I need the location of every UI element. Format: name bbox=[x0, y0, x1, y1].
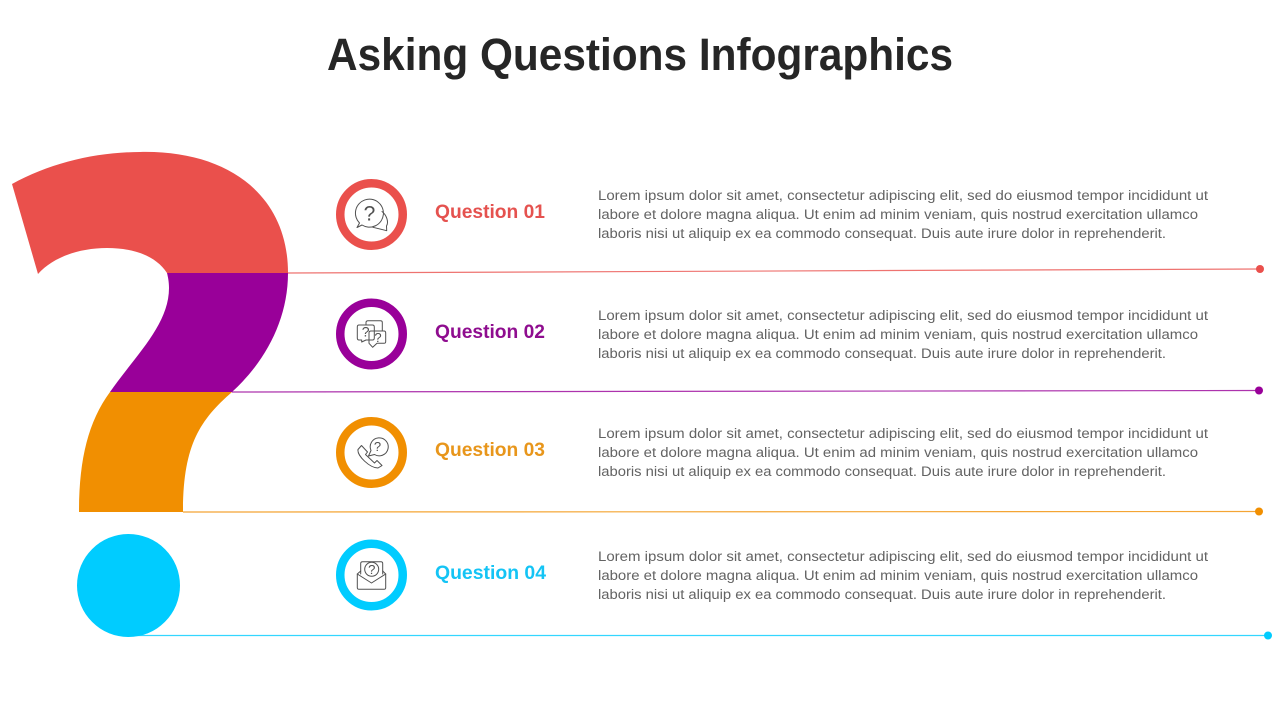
icon: phone with question bubble bbox=[340, 421, 403, 484]
question mark: orange segment bbox=[79, 392, 232, 512]
icon: open envelope with question: ? bbox=[368, 562, 375, 577]
title: Asking Questions Infographics bbox=[327, 29, 953, 80]
body text 3: Lorem ipsum dolor sit amet, consectetur adipiscing elit, sed do eiusmod tempor incididunt ut bbox=[598, 426, 1208, 442]
icon: three chat bubbles: ? bbox=[374, 330, 382, 345]
question mark: purple segment bbox=[110, 273, 288, 392]
body text 2: labore et dolore magna aliqua. Ut enim ad minim veniam, quis nostrud exercitation ullamco bbox=[598, 327, 1198, 343]
body text 4: Lorem ipsum dolor sit amet, consectetur adipiscing elit, sed do eiusmod tempor incididunt ut bbox=[598, 549, 1208, 565]
panel: question 03 bbox=[340, 421, 1212, 484]
label: Question 01: Question 01 bbox=[435, 202, 545, 223]
label: Question 03: Question 03 bbox=[435, 440, 545, 461]
leader line 4 bbox=[128, 632, 1272, 640]
body text 3: laboris nisi ut aliquip ex ea commodo consequat. Duis aute irure dolor in reprehenderit. bbox=[598, 464, 1166, 480]
question mark: blue dot bbox=[77, 534, 180, 637]
panel: question 04 bbox=[340, 544, 1212, 606]
body text 2: Lorem ipsum dolor sit amet, consectetur adipiscing elit, sed do eiusmod tempor incididunt ut bbox=[598, 308, 1208, 324]
question mark graphic bbox=[12, 152, 288, 637]
body text 1: Lorem ipsum dolor sit amet, consectetur adipiscing elit, sed do eiusmod tempor incididunt ut bbox=[598, 188, 1208, 204]
body text 4: labore et dolore magna aliqua. Ut enim ad minim veniam, quis nostrud exercitation ullamco bbox=[598, 568, 1198, 584]
label: Question 04: Question 04 bbox=[435, 563, 546, 584]
icon: three chat bubbles bbox=[340, 303, 403, 365]
leader line 1 bbox=[288, 265, 1264, 273]
icon: speech bubbles with question mark: ? bbox=[364, 203, 375, 226]
body text 3: labore et dolore magna aliqua. Ut enim ad minim veniam, quis nostrud exercitation ullamco bbox=[598, 445, 1198, 461]
icon: phone with question bubble: ? bbox=[374, 439, 381, 454]
icon: three chat bubbles: ? bbox=[362, 324, 370, 340]
question mark: red segment bbox=[12, 152, 288, 274]
panel: question 02 bbox=[340, 303, 1212, 365]
icon: speech bubbles with question mark bbox=[340, 183, 403, 246]
body text 1: labore et dolore magna aliqua. Ut enim ad minim veniam, quis nostrud exercitation ullamco bbox=[598, 207, 1198, 223]
leader line 3 bbox=[183, 508, 1263, 516]
body text 2: laboris nisi ut aliquip ex ea commodo consequat. Duis aute irure dolor in reprehenderit. bbox=[598, 346, 1166, 362]
icon: open envelope with question bbox=[340, 544, 403, 606]
body text 1: laboris nisi ut aliquip ex ea commodo consequat. Duis aute irure dolor in reprehenderit. bbox=[598, 226, 1166, 242]
body text 4: laboris nisi ut aliquip ex ea commodo consequat. Duis aute irure dolor in reprehenderit. bbox=[598, 587, 1166, 603]
leader line 2 bbox=[232, 386, 1263, 394]
label: Question 02: Question 02 bbox=[435, 322, 545, 343]
panel: question 01 bbox=[340, 183, 1212, 246]
